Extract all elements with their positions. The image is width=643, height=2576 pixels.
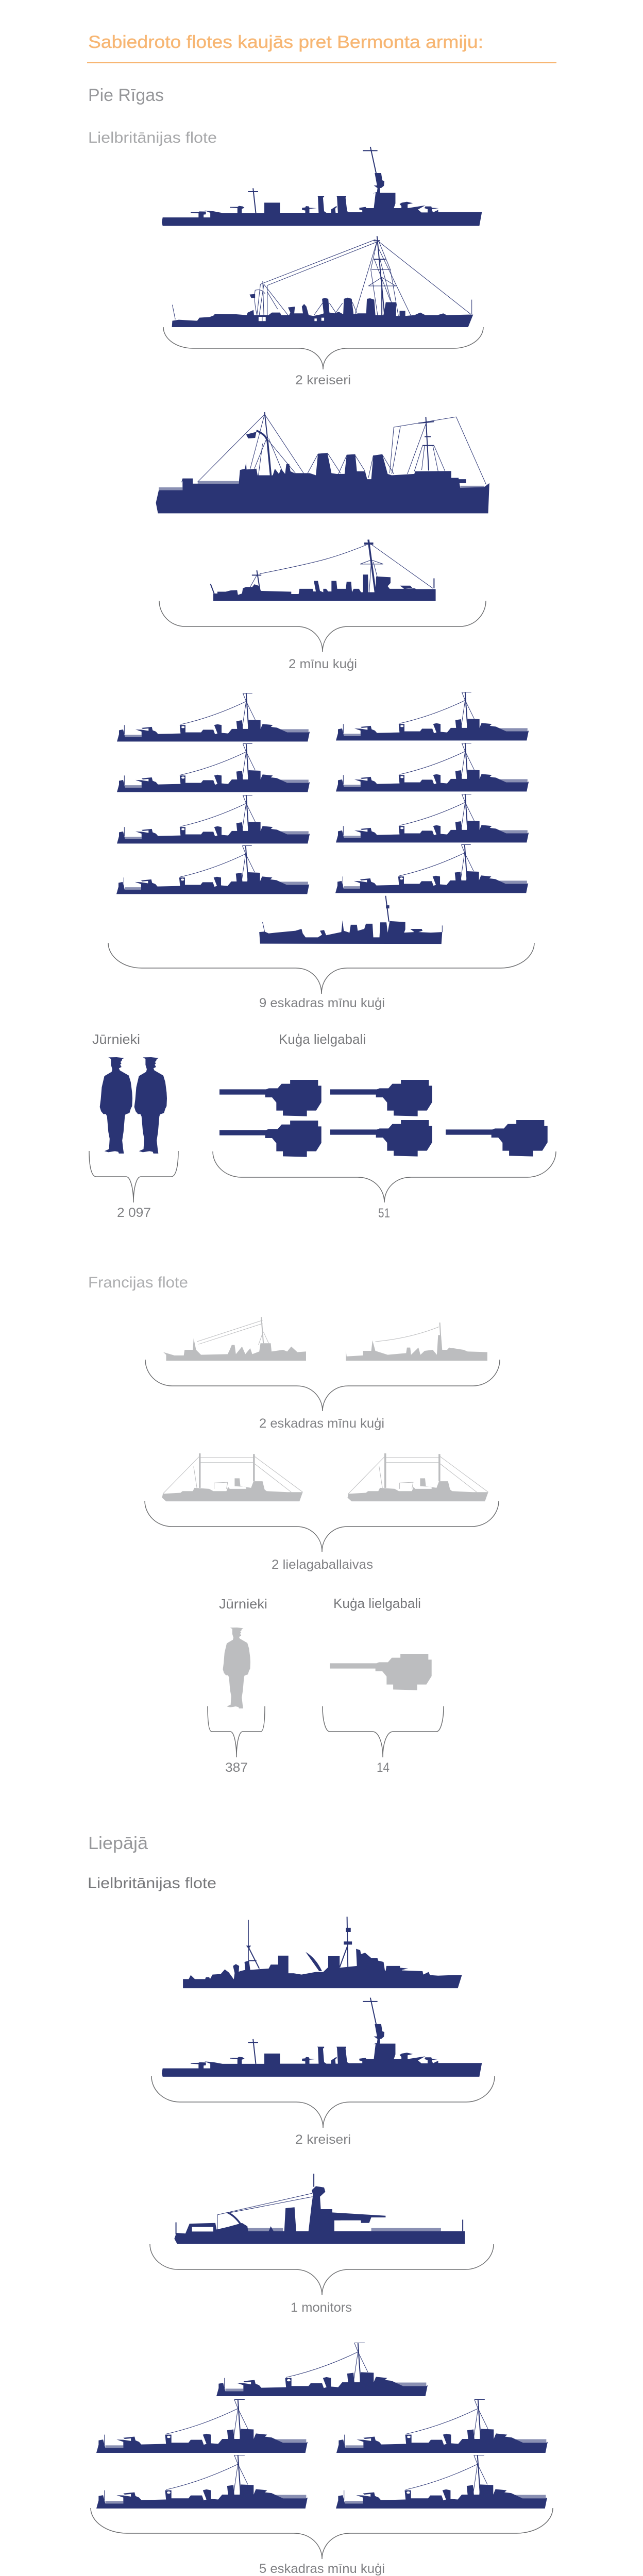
icon: destroyer variant [259,896,442,944]
panel: French sailors [208,1596,267,1775]
icon: two sailors [100,1057,167,1154]
icon: rigged cruiser silhouette [172,236,473,327]
panel: 5 destroyers [91,2343,553,2576]
brace: guns [323,1706,444,1757]
panel: 2 minelayers [156,412,489,671]
label: 2 destroyers: 2 eskadras mīnu kuģi [259,1416,384,1431]
label: 5 destroyers: 5 eskadras mīnu kuģi [259,2562,385,2576]
panel: British ship guns near Riga [213,1031,556,1221]
number: 387: 387 [225,1760,248,1775]
brace: destroyers [91,2508,553,2559]
panel: 2 gunboats [145,1453,499,1572]
panel: 2 cruisers [162,147,483,387]
label: ship guns: Kuģa lielgabali [279,1031,366,1047]
icon: cruiser silhouette [162,147,482,226]
label: 2 minelayers: 2 mīnu kuģi [289,657,357,671]
subheading: Liepaja: Liepājā [88,1834,148,1853]
icon: two-masted cruiser [183,1917,462,1988]
brace: destroyers [108,943,534,994]
label: 1 monitor: 1 monitors [291,2300,352,2315]
icon: French destroyer 1 [163,1317,306,1361]
section: Liepaja [88,1834,553,2576]
brace: monitor [150,2244,494,2295]
label: 2 gunboats: 2 lielagaballaivas [272,1557,373,1572]
label: ship guns: Kuģa lielgabali [333,1596,421,1611]
panel: 2 cruisers [151,1917,495,2147]
heading: fleet in battles: Sabiedroto flotes kaujās pret Bermonta armiju: [88,32,483,52]
number: 14: 14 [377,1760,390,1775]
brace: cruisers [151,2076,495,2128]
icon: cruiser [162,1998,482,2077]
section: Allied fleet in battles against Bermont [87,32,556,1221]
brace: minelayers [159,601,486,652]
icon: French destroyer 2 [346,1323,487,1361]
subheading: British fleet: Lielbritānijas flote [88,1875,216,1892]
panel: French guns [323,1596,444,1775]
subheading: French fleet: Francijas flote [88,1274,188,1291]
icon: gun [330,1654,432,1690]
icon: gunboat 2 [347,1453,488,1501]
panel: 1 monitor [150,2174,494,2315]
brace: gunboats [145,1501,499,1552]
label: 2 cruisers: 2 kreiseri [295,2132,351,2147]
brace: guns [213,1151,556,1202]
brace: cruisers [163,327,483,369]
icon: destroyers grid [116,692,529,894]
panel: British sailors near Riga [89,1031,178,1220]
icon: five destroyers [96,2343,548,2509]
label: 9 destroyers: 9 eskadras mīnu kuģi [259,996,385,1010]
icon: five guns [219,1080,548,1157]
icon: small minelayer [210,539,436,601]
number: 51: 51 [378,1206,390,1221]
label: sailors: Jūrnieki [219,1596,267,1612]
subheading: near Riga: Pie Rīgas [88,86,164,105]
panel: 9 destroyers [108,692,534,1010]
label: 2 cruisers: 2 kreiseri [295,373,351,387]
panel: 2 destroyers [145,1317,500,1431]
number: 2 097: 2 097 [117,1206,151,1220]
icon: sailor [223,1628,250,1708]
brace: sailors [208,1706,265,1757]
label: sailors: Jūrnieki [92,1031,140,1047]
brace: French destroyers [145,1360,500,1411]
section: French fleet [88,1274,500,1775]
subheading: British fleet: Lielbritānijas flote [88,129,217,146]
icon: gunboat 1 [162,1453,303,1501]
brace: sailors [89,1151,178,1202]
icon: large minelayer [156,412,489,513]
icon: monitor ship [174,2174,465,2244]
